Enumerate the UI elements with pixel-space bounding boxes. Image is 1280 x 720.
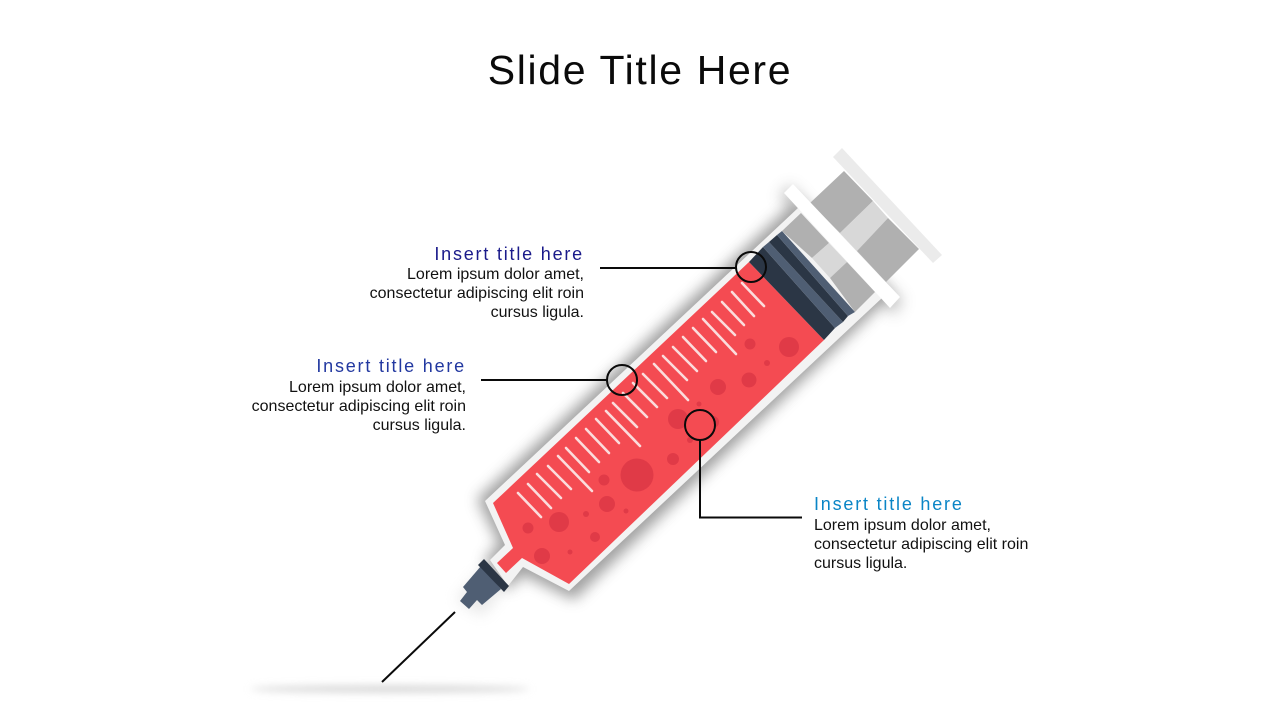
text block 3: consectetur adipiscing elit roin — [814, 536, 1028, 553]
text block 2: consectetur adipiscing elit roin — [252, 398, 466, 415]
callout 2 leader — [481, 365, 637, 395]
plunger rod gray block lower — [857, 218, 919, 282]
plunger head — [833, 148, 942, 263]
text block 1: Lorem ipsum dolor amet, — [407, 266, 584, 283]
shadows behind syringe — [456, 184, 904, 616]
liquid fill — [493, 262, 824, 584]
needle — [382, 612, 455, 682]
needle hub — [460, 559, 509, 609]
text block 2: Insert title here — [316, 356, 466, 376]
text block 2: Lorem ipsum dolor amet, — [289, 379, 466, 396]
text block 1: consectetur adipiscing elit roin — [370, 285, 584, 302]
callout 3 leader — [685, 410, 802, 518]
text block 3 — [814, 494, 1028, 572]
text block 1: Insert title here — [434, 244, 584, 264]
text block 3: Insert title here — [814, 494, 964, 514]
bubbles in liquid — [522, 337, 799, 564]
barrel flange — [784, 184, 900, 308]
plunger seal — [749, 231, 855, 340]
ground shadow — [250, 686, 530, 692]
text block 2 — [252, 356, 466, 434]
plunger rod gray block upper — [810, 171, 873, 233]
barrel casing — [485, 208, 882, 591]
text block 3: cursus ligula. — [814, 555, 907, 572]
plunger rod inside barrel — [782, 213, 875, 312]
plunger rod light stripe — [840, 201, 888, 251]
callout 1 leader — [600, 252, 766, 282]
title: Slide Title Here — [488, 47, 792, 93]
plunger — [810, 148, 942, 282]
text block 1: cursus ligula. — [491, 304, 584, 321]
measurement ticks — [518, 283, 764, 517]
text block 1 — [370, 244, 584, 321]
text block 3: Lorem ipsum dolor amet, — [814, 517, 991, 534]
text block 2: cursus ligula. — [373, 417, 466, 434]
